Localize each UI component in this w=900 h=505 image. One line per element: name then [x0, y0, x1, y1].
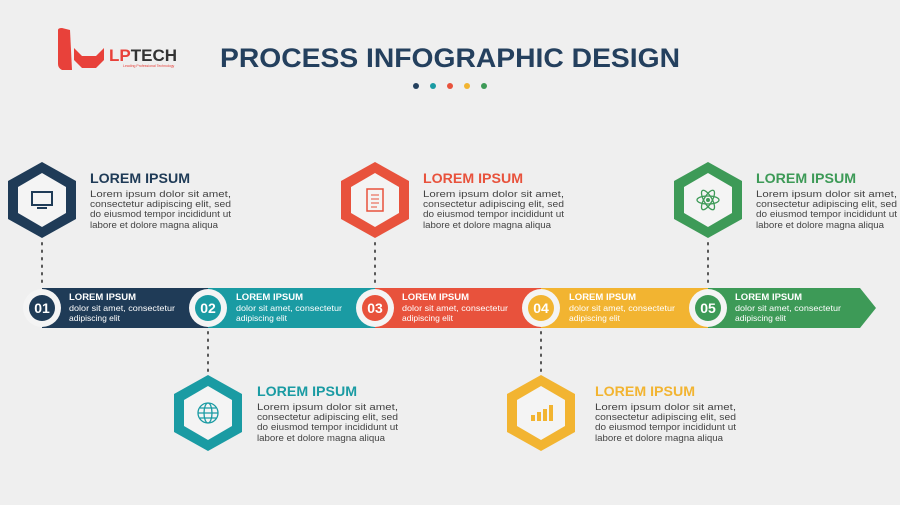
text blocks: labore et dolore magna aliqua: [257, 433, 385, 443]
text blocks: consectetur adipiscing elit, sed: [423, 199, 564, 209]
hexagon 4 (chart): [507, 375, 575, 451]
text blocks: Lorem ipsum dolor sit amet,: [257, 402, 398, 412]
text blocks: LOREM IPSUM: [756, 170, 856, 186]
text blocks: LOREM IPSUM: [423, 170, 523, 186]
process bar: 04: [533, 300, 549, 316]
process bar: LOREM IPSUM: [569, 292, 636, 303]
text blocks: do eiusmod tempor incididunt ut: [756, 209, 898, 219]
text blocks: consectetur adipiscing elit, sed: [595, 412, 736, 422]
process bar: dolor sit amet, consectetur: [69, 303, 175, 313]
title dots: [413, 83, 487, 89]
process bar: adipiscing elit: [236, 313, 288, 323]
text blocks: LOREM IPSUM: [257, 383, 357, 399]
process bar: 01: [34, 300, 50, 316]
process bar: dolor sit amet, consectetur: [236, 303, 342, 313]
text blocks: [90, 170, 898, 443]
text blocks: labore et dolore magna aliqua: [595, 433, 723, 443]
process bar: dolor sit amet, consectetur: [569, 303, 675, 313]
text blocks: Lorem ipsum dolor sit amet,: [423, 189, 564, 199]
dotted connectors: [42, 243, 708, 372]
hexagon 3 (document): [341, 162, 409, 238]
process bar: adipiscing elit: [569, 313, 621, 323]
process bar: dolor sit amet, consectetur: [402, 303, 508, 313]
process bar: adipiscing elit: [69, 313, 121, 323]
process bar: adipiscing elit: [402, 313, 454, 323]
logo: [58, 28, 177, 70]
text blocks: Lorem ipsum dolor sit amet,: [595, 402, 736, 412]
text blocks: do eiusmod tempor incididunt ut: [257, 422, 399, 432]
text blocks: consectetur adipiscing elit, sed: [756, 199, 897, 209]
text blocks: Lorem ipsum dolor sit amet,: [90, 189, 231, 199]
process bar: [23, 288, 876, 328]
text blocks: do eiusmod tempor incididunt ut: [595, 422, 737, 432]
text blocks: labore et dolore magna aliqua: [90, 220, 218, 230]
process bar: 03: [367, 300, 383, 316]
process bar: dolor sit amet, consectetur: [735, 303, 841, 313]
process bar: 02: [200, 300, 216, 316]
process bar: adipiscing elit: [735, 313, 787, 323]
hexagon 1 (monitor): [8, 162, 76, 238]
process bar: LOREM IPSUM: [735, 292, 802, 303]
text blocks: consectetur adipiscing elit, sed: [90, 199, 231, 209]
text blocks: LOREM IPSUM: [90, 170, 190, 186]
text blocks: labore et dolore magna aliqua: [423, 220, 551, 230]
process bar: LOREM IPSUM: [69, 292, 136, 303]
title: PROCESS INFOGRAPHIC DESIGN: [220, 43, 680, 73]
text blocks: do eiusmod tempor incididunt ut: [90, 209, 232, 219]
process bar: LOREM IPSUM: [236, 292, 303, 303]
logo: LPTECH: [109, 46, 177, 65]
text blocks: Lorem ipsum dolor sit amet,: [756, 189, 897, 199]
text blocks: consectetur adipiscing elit, sed: [257, 412, 398, 422]
hexagon 2 (globe): [174, 375, 242, 451]
process bar: LOREM IPSUM: [402, 292, 469, 303]
process bar: 05: [700, 300, 716, 316]
hexagon 5 (atom): [674, 162, 742, 238]
logo: Leading Professional Technology: [123, 64, 175, 68]
text blocks: labore et dolore magna aliqua: [756, 220, 884, 230]
text blocks: LOREM IPSUM: [595, 383, 695, 399]
text blocks: do eiusmod tempor incididunt ut: [423, 209, 565, 219]
